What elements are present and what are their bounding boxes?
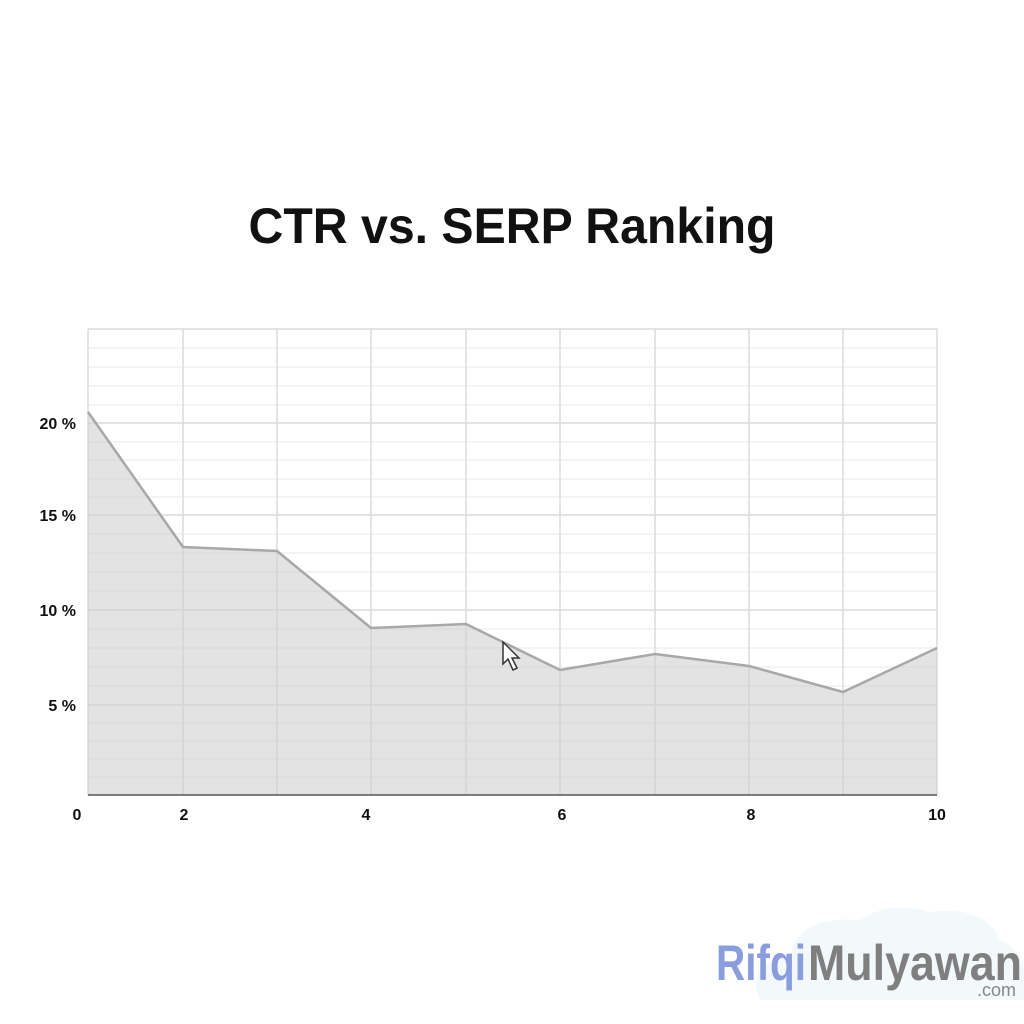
- y-axis labels: [40, 416, 76, 715]
- logo: RifqiMulyawan.com: Rifqi: [716, 935, 806, 991]
- x-axis labels: 8: [747, 807, 756, 824]
- x-axis labels: 10: [928, 807, 946, 824]
- y-axis labels: 10 %: [40, 603, 76, 620]
- y-axis labels: 20 %: [40, 416, 76, 433]
- x-axis labels: [73, 807, 946, 824]
- icon: mouse cursor: [503, 642, 519, 670]
- y-axis labels: 15 %: [40, 508, 76, 525]
- logo: RifqiMulyawan.com: .com: [977, 980, 1016, 1000]
- x-axis labels: 0: [73, 807, 82, 824]
- title: CTR vs. SERP Ranking: [248, 198, 776, 254]
- y-axis labels: 5 %: [48, 698, 76, 715]
- logo: RifqiMulyawan.com: [716, 908, 1024, 1000]
- x-axis labels: 2: [180, 807, 189, 824]
- chart: CTR line area: [88, 329, 937, 795]
- x-axis labels: 4: [362, 807, 371, 824]
- x-axis labels: 6: [558, 807, 567, 824]
